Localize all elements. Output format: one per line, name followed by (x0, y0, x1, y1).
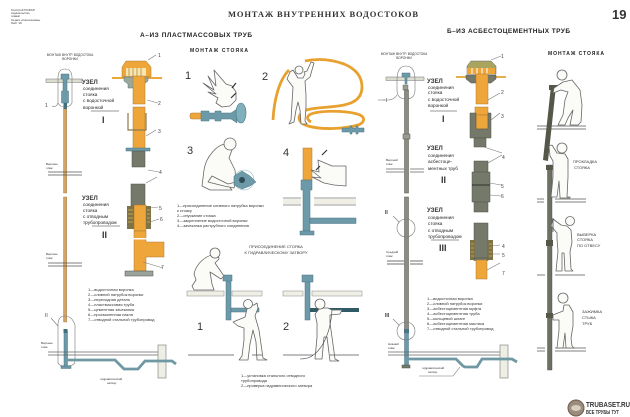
step 3: tightening funnel fitting (187, 138, 256, 190)
text block: node III label B: УЗЕЛ (427, 208, 443, 214)
legend A: 4—пластмассовая труба (88, 302, 135, 307)
caption: installation steps: 1—присоединение сливного патрубка воронки (177, 203, 264, 208)
heading: connecting riser to trap: К ГИДРАВЛИЧЕСКОМУ ЗАТВОРУ (245, 250, 308, 255)
detail: branch joint A (125, 177, 164, 276)
panel: riser overview B: III (385, 313, 390, 319)
text block: node II label A: II (102, 230, 107, 240)
panel: riser overview B: Верхний (386, 158, 398, 162)
detail: branch joint B: 5 (502, 253, 505, 259)
step 2: laying out the hose pipe (262, 60, 364, 134)
panel: riser overview B: Нижний (388, 342, 399, 346)
panel: riser overview B: затвор (428, 370, 438, 374)
legend A: 2—сливной патрубок воронки (88, 292, 143, 297)
panel: riser overview B: этаж (386, 162, 392, 166)
text block: node II label A: с отводным (83, 214, 108, 219)
label: joint clamping (582, 309, 602, 326)
label: plumb check: ВЫВЕРКА (577, 232, 597, 237)
text block: node I label A: стояка (83, 92, 98, 97)
logo: watermark (568, 400, 630, 416)
panel: riser overview B: I (386, 98, 387, 104)
heading: riser installation A: МОНТАЖ СТОЯКА (190, 48, 248, 54)
worker 4 (553, 305, 574, 348)
text block: node II label A: соединения (83, 202, 109, 207)
worker 2 (549, 145, 570, 198)
label: plumb check (577, 232, 601, 248)
caption: trap connection (241, 373, 313, 388)
legend B: 3—асбестоцементная муфта (427, 306, 482, 311)
detail: funnel joint A: 2 (158, 101, 161, 107)
detail: funnel joint B (456, 54, 506, 161)
label: pipe laying: ПРОКЛАДКА (573, 159, 597, 164)
text block: node I label B: УЗЕЛ (427, 79, 443, 85)
legend B: 1—водосточная воронка (427, 296, 474, 301)
panel: riser overview B: ВОРОНКИ (396, 56, 412, 60)
legend A: 7—отводной стальной трубопровод (88, 317, 155, 322)
detail: funnel joint B: 3 (501, 114, 504, 120)
worker 1 (553, 80, 582, 125)
text block: node II label A: трубопроводом (83, 220, 117, 225)
detail: branch joint B: 4 (502, 244, 505, 250)
detail: funnel joint A (112, 53, 162, 176)
label: joint clamping: ТРУБ (582, 321, 593, 326)
text block: node I label A: с водосточной (83, 97, 115, 103)
text block: node I label A: УЗЕЛ (82, 80, 98, 86)
legend A: 3—переходная деталь (88, 297, 130, 302)
step 1: fitting the funnel spigot (185, 70, 246, 123)
panel: riser overview B: этаж (388, 346, 394, 350)
legend B: 5—кольцевой шланг (427, 316, 466, 321)
label: pipe laying: СТОЯКА (574, 165, 590, 170)
panel: riser overview A (41, 53, 176, 385)
caption: installation steps: к стояку (177, 208, 192, 213)
panel: riser overview A: 1 (45, 103, 48, 109)
detail: funnel joint A: 4 (159, 170, 162, 176)
caption: trap connection: 2—проверка гидравлического затвора (241, 383, 313, 388)
heading: connecting riser to trap: ПРИСОЕДИНЕНИЕ СТОЯКА (249, 244, 303, 249)
text block: node III label B: соединения (428, 215, 454, 220)
figure: trap connection 2: 2 (283, 321, 289, 333)
detail: pipe joint B: 6 (501, 194, 504, 200)
floor line: figure 2 (283, 354, 359, 356)
figure: trap connection 2 (283, 275, 362, 361)
legend B: 7—отводной стальной трубопровод (427, 326, 494, 331)
legend A: 6—просмоленная пакля (88, 312, 133, 317)
detail: funnel joint B: 2 (501, 90, 504, 96)
page number: 19 (612, 7, 626, 22)
text block: node I label A (82, 80, 119, 125)
panel: riser overview A: II (45, 313, 48, 319)
figure: trap connection 1: 1 (197, 321, 203, 333)
publisher note (11, 8, 41, 25)
text block: node I label A: соединения (83, 86, 109, 91)
text block: node II label B (427, 146, 458, 185)
text block: node II label B: II (441, 175, 446, 185)
legend B (427, 296, 494, 331)
pipe: tilted riser (543, 86, 556, 161)
text block: node II label B: соединения (428, 153, 454, 158)
panel: riser overview A: этаж (41, 345, 47, 349)
panel: riser overview A: этаж (46, 256, 52, 260)
legend B: 4—асбестоцементная труба (427, 311, 480, 316)
caption: installation steps (177, 203, 264, 228)
publisher note: плакат (11, 14, 21, 18)
heading: connecting riser to trap (245, 244, 308, 255)
detail: funnel joint A: 3 (158, 129, 161, 135)
heading: section A: А–ИЗ ПЛАСТМАССОВЫХ ТРУБ (140, 32, 252, 39)
caption: trap connection: трубопровода (241, 378, 268, 383)
detail: branch joint B: 7 (502, 271, 505, 277)
text block: node I label B: соединения (428, 85, 454, 90)
text block: node II label B: УЗЕЛ (427, 146, 443, 152)
step 4: socket sealing: 4 (283, 147, 289, 159)
detail: branch joint B (470, 223, 505, 279)
text block: node I label B: с водосточной (428, 96, 460, 102)
detail: funnel joint B: 1 (501, 54, 504, 60)
caption: installation steps: 2—опускание стояка (177, 213, 216, 218)
detail: branch joint A: 5 (159, 206, 162, 212)
legend B: 6—асбестоцементная мастика (427, 321, 485, 326)
panel: riser overview B: Средний (386, 250, 399, 254)
label: joint clamping: ЗАЖИМКА (582, 309, 602, 314)
panel: riser overview A: МОНТАЖ ВНУТР. ВОДОСТОКА (47, 53, 94, 57)
panel: riser overview B (378, 52, 517, 378)
text block: node I label A: I (102, 115, 105, 125)
step 1: fitting the funnel spigot: 1 (185, 70, 191, 82)
detail: funnel joint A: 1 (158, 53, 161, 59)
caption: installation steps: 3—закрепление водосточной воронки (177, 218, 248, 223)
legend B: 2—сливной патрубок воронки (427, 301, 482, 306)
text block: node II label A: УЗЕЛ (82, 196, 98, 202)
panel: riser overview A: Верхнее (46, 252, 58, 256)
text block: node I label B: стояка (428, 90, 443, 95)
panel: riser overview B: гидравлический (422, 366, 445, 370)
text block: node I label B (427, 79, 460, 124)
text block: node III label B: трубопроводом (428, 234, 462, 239)
panel: riser overview A: Верхнее (46, 162, 58, 166)
text block: node II label B: ментных труб (428, 166, 458, 171)
text block: node II label A: стояка (83, 208, 98, 213)
worker 3 (551, 219, 573, 271)
publisher note: Лист 19 (11, 21, 22, 25)
heading: section B: Б–ИЗ АСБЕСТОЦЕМЕНТНЫХ ТРУБ (447, 28, 570, 35)
text block: node III label B: стояка (428, 221, 443, 226)
text block: node III label B (427, 208, 462, 253)
text block: node I label A: воронкой (83, 104, 104, 110)
text block: node III label B: III (439, 243, 447, 253)
panel: riser overview A: гидравлический (100, 377, 123, 381)
publisher note: Госстрой РСФСР (11, 8, 35, 12)
detail: pipe joint B: 5 (501, 184, 504, 190)
step 2: laying out the hose pipe: 2 (262, 71, 268, 83)
panel: riser overview B: этаж (386, 254, 392, 258)
panel: riser overview A: затвор (107, 381, 117, 385)
publisher note: издательство (11, 11, 30, 15)
text block: node I label B: воронкой (428, 102, 449, 108)
detail: funnel joint B: 4 (502, 155, 505, 161)
publisher note: Серия «Сантехника» (11, 18, 41, 22)
panel: riser overview B: II (385, 210, 388, 216)
panel: riser overview A: Верхнее (41, 341, 53, 345)
label: plumb check: ПО ОТВЕСУ (577, 243, 601, 248)
text block: node II label A (82, 196, 120, 240)
text block: node II label B: асбестоце- (428, 159, 452, 164)
heading: riser installation B: МОНТАЖ СТОЯКА (548, 51, 604, 57)
legend A (88, 287, 155, 322)
panel: riser overview A: ВОРОНКИ (62, 57, 78, 61)
panel: riser installation figures (537, 70, 602, 370)
detail: branch joint A: 6 (160, 217, 163, 223)
detail: branch joint A: 7 (161, 265, 164, 271)
logo: watermark: ВСЕ ТРУБЫ ТУТ (586, 410, 619, 416)
caption: installation steps: 4—зачеканка раструбного соединения (177, 223, 249, 228)
caption: trap connection: 1—установка стального отводного (241, 373, 306, 378)
title: МОНТАЖ ВНУТРЕННИХ ВОДОСТОКОВ (228, 9, 418, 19)
panel: riser overview B: МОНТАЖ ВНУТР. ВОДОСТОКА (381, 52, 428, 56)
panel: riser overview A: этаж (46, 166, 52, 170)
label: plumb check: СТОЯКА (577, 237, 593, 242)
legend A: 5—цементная зачеканка (88, 307, 135, 312)
legend A: 1—водосточная воронка (88, 287, 135, 292)
pipe: vertical riser (548, 165, 552, 370)
text block: node III label B: с отводным (428, 228, 453, 233)
figure: trap connection 1 (187, 248, 267, 360)
label: pipe laying (573, 159, 597, 170)
label: joint clamping: СТЫКА (582, 315, 596, 320)
step 4: socket sealing (283, 147, 356, 235)
step 3: tightening funnel fitting: 3 (187, 145, 193, 157)
detail: pipe joint B (472, 155, 504, 212)
text block: node I label B: I (442, 114, 445, 124)
